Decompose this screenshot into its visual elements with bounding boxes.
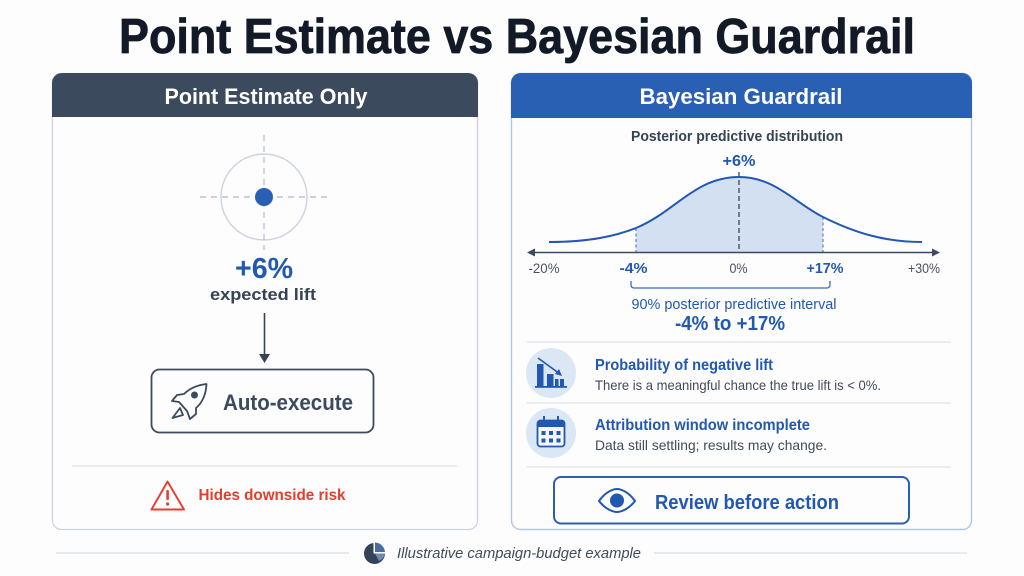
chart: posterior predictive distribution (527, 172, 940, 277)
interval label: 90% posterior predictive interval (632, 297, 836, 313)
axis labels (528, 260, 940, 277)
axis labels: -4% (620, 260, 648, 277)
auto-execute box: Auto-execute (223, 390, 353, 415)
footer (56, 542, 967, 564)
panel: point estimate only (52, 73, 478, 530)
interval bracket (631, 281, 830, 288)
axis labels: 0% (730, 260, 748, 276)
title: Point Estimate vs Bayesian Guardrail (119, 10, 915, 64)
row: probability of negative lift (526, 348, 881, 398)
review before action button (554, 477, 909, 524)
panel header: point estimate only: Point Estimate Only (164, 84, 368, 109)
chart heading: Posterior predictive distribution (631, 129, 843, 145)
warning text: Hides downside risk (198, 487, 346, 504)
panel header: bayesian guardrail (511, 73, 972, 118)
panel header: point estimate only (52, 73, 478, 117)
icon: pie chart (364, 542, 385, 564)
expected lift label: expected lift (210, 285, 316, 304)
row: attribution window incomplete: Attribution window incomplete (595, 417, 810, 434)
icon: warning triangle (152, 482, 184, 510)
auto-execute box (152, 370, 374, 432)
row: attribution window incomplete: Data still settling; results may change. (595, 437, 827, 453)
icon: declining bars (526, 348, 576, 398)
axis labels: +30% (908, 260, 940, 276)
review before action button: Review before action (655, 492, 839, 514)
row: probability of negative lift: Probability of negative lift (595, 357, 774, 374)
arrow: down to auto-execute (259, 313, 270, 363)
mean label: +6% (722, 153, 756, 170)
interval value: -4% to +17% (675, 313, 785, 335)
icon: calendar (526, 408, 576, 458)
icon: rocket (172, 384, 206, 419)
row: probability of negative lift: There is a meaningful chance the true lift is < 0%. (595, 377, 881, 393)
panel: bayesian guardrail (511, 73, 972, 530)
footer: Illustrative campaign-budget example (397, 546, 641, 562)
expected lift value: +6% (235, 253, 293, 285)
axis labels: -20% (528, 260, 560, 276)
icon: target with point estimate (200, 135, 329, 250)
panel header: bayesian guardrail: Bayesian Guardrail (640, 84, 842, 109)
icon: eye (599, 489, 635, 512)
row: attribution window incomplete (526, 408, 827, 458)
axis labels: +17% (806, 260, 844, 277)
